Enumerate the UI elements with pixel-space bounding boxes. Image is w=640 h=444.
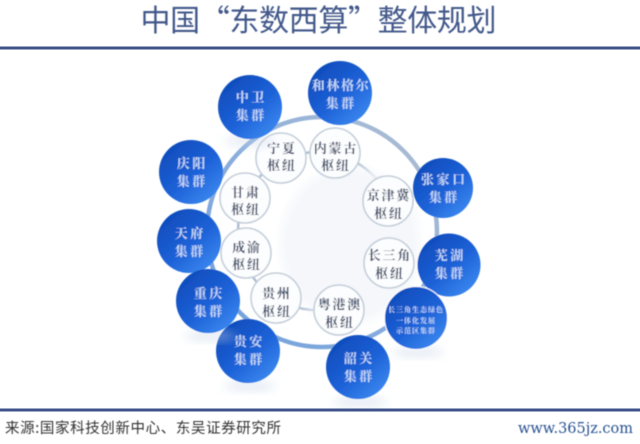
hub: 京津冀枢纽: 枢纽	[374, 203, 404, 222]
website watermark: www.365jz.com	[518, 419, 633, 437]
cluster: 重庆集群: 重庆	[194, 283, 225, 302]
cluster: 韶关集群: 集群	[344, 366, 375, 385]
hub: 甘肃枢纽	[220, 173, 270, 223]
cluster: 张家口集群: 张家口	[421, 169, 468, 188]
cluster: 天府集群: 天府	[175, 223, 206, 242]
cluster: 韶关集群	[326, 335, 390, 406]
cluster: 中卫集群	[218, 75, 282, 147]
source note: 来源:国家科技创新中心、东吴证券研究所	[5, 417, 281, 438]
cluster: 张家口集群: 集群	[429, 187, 460, 206]
outer ring	[207, 117, 437, 347]
hub shadow	[280, 167, 420, 323]
hub: 内蒙古枢纽: 枢纽	[321, 155, 351, 174]
cluster: 天府集群	[157, 209, 221, 273]
cluster: 芜湖集群	[418, 234, 480, 296]
hub: 长三角枢纽: 长三角	[368, 245, 412, 264]
cluster: 重庆集群: 集群	[194, 301, 225, 320]
cluster: 长三角生态绿色一体化发展示范区集群: 一体化发展	[396, 316, 436, 326]
diagram: hub and cluster rings	[157, 61, 480, 406]
cluster: 庆阳集群: 集群	[177, 171, 208, 190]
hub: 长三角枢纽	[364, 238, 414, 288]
hub: 宁夏枢纽: 宁夏	[267, 138, 297, 157]
hub: 贵州枢纽	[251, 273, 301, 323]
hub: 粤港澳枢纽	[314, 285, 364, 335]
hub: 粤港澳枢纽: 枢纽	[325, 312, 355, 331]
title rule	[0, 46, 640, 50]
hub: 粤港澳枢纽: 粤港澳	[318, 294, 362, 313]
hub: 成渝枢纽	[221, 228, 271, 278]
cluster: 长三角生态绿色一体化发展示范区集群	[384, 286, 448, 357]
cluster: 芜湖集群: 芜湖	[435, 245, 466, 264]
hub: 成渝枢纽: 成渝	[232, 237, 262, 256]
cluster: 贵安集群	[216, 319, 280, 391]
hub: 京津冀枢纽	[363, 176, 413, 226]
cluster: 长三角生态绿色一体化发展示范区集群: 示范区集群	[396, 326, 436, 336]
cluster: 重庆集群	[176, 269, 240, 341]
cluster: 和林格尔集群: 集群	[326, 93, 357, 112]
cluster: 张家口集群	[413, 158, 473, 218]
hub: 甘肃枢纽: 甘肃	[231, 182, 261, 201]
cluster: 长三角生态绿色一体化发展示范区集群: 长三角生态绿色	[388, 305, 444, 315]
inner ring	[238, 152, 396, 310]
hub: 成渝枢纽: 枢纽	[232, 254, 262, 273]
cluster: 庆阳集群	[159, 140, 223, 204]
cluster: 中卫集群: 中卫	[236, 87, 267, 106]
hub: 贵州枢纽: 枢纽	[262, 301, 292, 320]
footer rule	[0, 408, 640, 412]
cluster: 贵安集群: 贵安	[234, 331, 265, 350]
hub: 京津冀枢纽: 京津冀	[367, 185, 411, 204]
cluster: 和林格尔集群: 和林格尔	[312, 75, 370, 94]
hub: 贵州枢纽: 贵州	[262, 283, 292, 302]
hub: 内蒙古枢纽: 内蒙古	[314, 138, 358, 157]
hub: 甘肃枢纽: 枢纽	[231, 199, 261, 218]
cluster: 韶关集群: 韶关	[344, 348, 375, 367]
cluster: 天府集群: 集群	[175, 241, 206, 260]
hub: 宁夏枢纽: 枢纽	[267, 155, 297, 174]
cluster: 贵安集群: 集群	[234, 349, 265, 368]
cluster: 芜湖集群: 集群	[435, 263, 466, 282]
hub: 内蒙古枢纽	[310, 128, 360, 178]
cluster: 中卫集群: 集群	[236, 105, 267, 124]
cluster: 和林格尔集群	[308, 61, 372, 125]
hub: 长三角枢纽: 枢纽	[375, 263, 405, 282]
hub: 宁夏枢纽	[256, 133, 306, 183]
cluster: 庆阳集群: 庆阳	[177, 153, 208, 172]
